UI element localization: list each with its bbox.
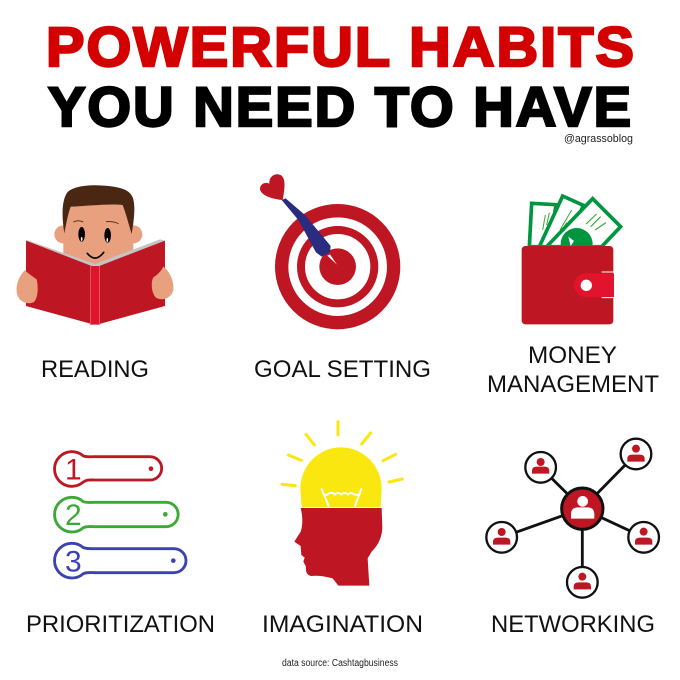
label: reading: READING: [41, 356, 149, 383]
icon: numbered priority list: 2: [65, 499, 82, 532]
data source note: data source: Cashtagbusiness: [282, 658, 398, 669]
wallet body: [522, 246, 613, 324]
label: networking: NETWORKING: [491, 611, 655, 638]
icon: numbered priority list: 3: [65, 545, 82, 578]
label: prioritization: PRIORITIZATION: [26, 611, 215, 638]
icon: people network: [486, 439, 659, 598]
title: POWERFUL HABITS: [46, 15, 636, 78]
label: goal setting: GOAL SETTING: [254, 356, 431, 383]
author credit: @agrassoblog: [564, 133, 633, 145]
label: money management: [487, 342, 659, 398]
label: money management: MANAGEMENT: [487, 371, 659, 398]
icon: dart target: [260, 174, 394, 323]
icon: numbered priority list: 1: [65, 453, 82, 486]
label: money management: MONEY: [528, 342, 617, 369]
wallet clasp: [574, 273, 614, 297]
icon: wallet with money: [522, 196, 621, 324]
title: [46, 15, 636, 138]
title: YOU NEED TO HAVE: [48, 75, 633, 138]
icon: head with light bulb: [282, 422, 402, 586]
icon: person reading: [17, 185, 173, 325]
icon: numbered priority list: [55, 452, 186, 578]
label: imagination: IMAGINATION: [262, 611, 423, 638]
